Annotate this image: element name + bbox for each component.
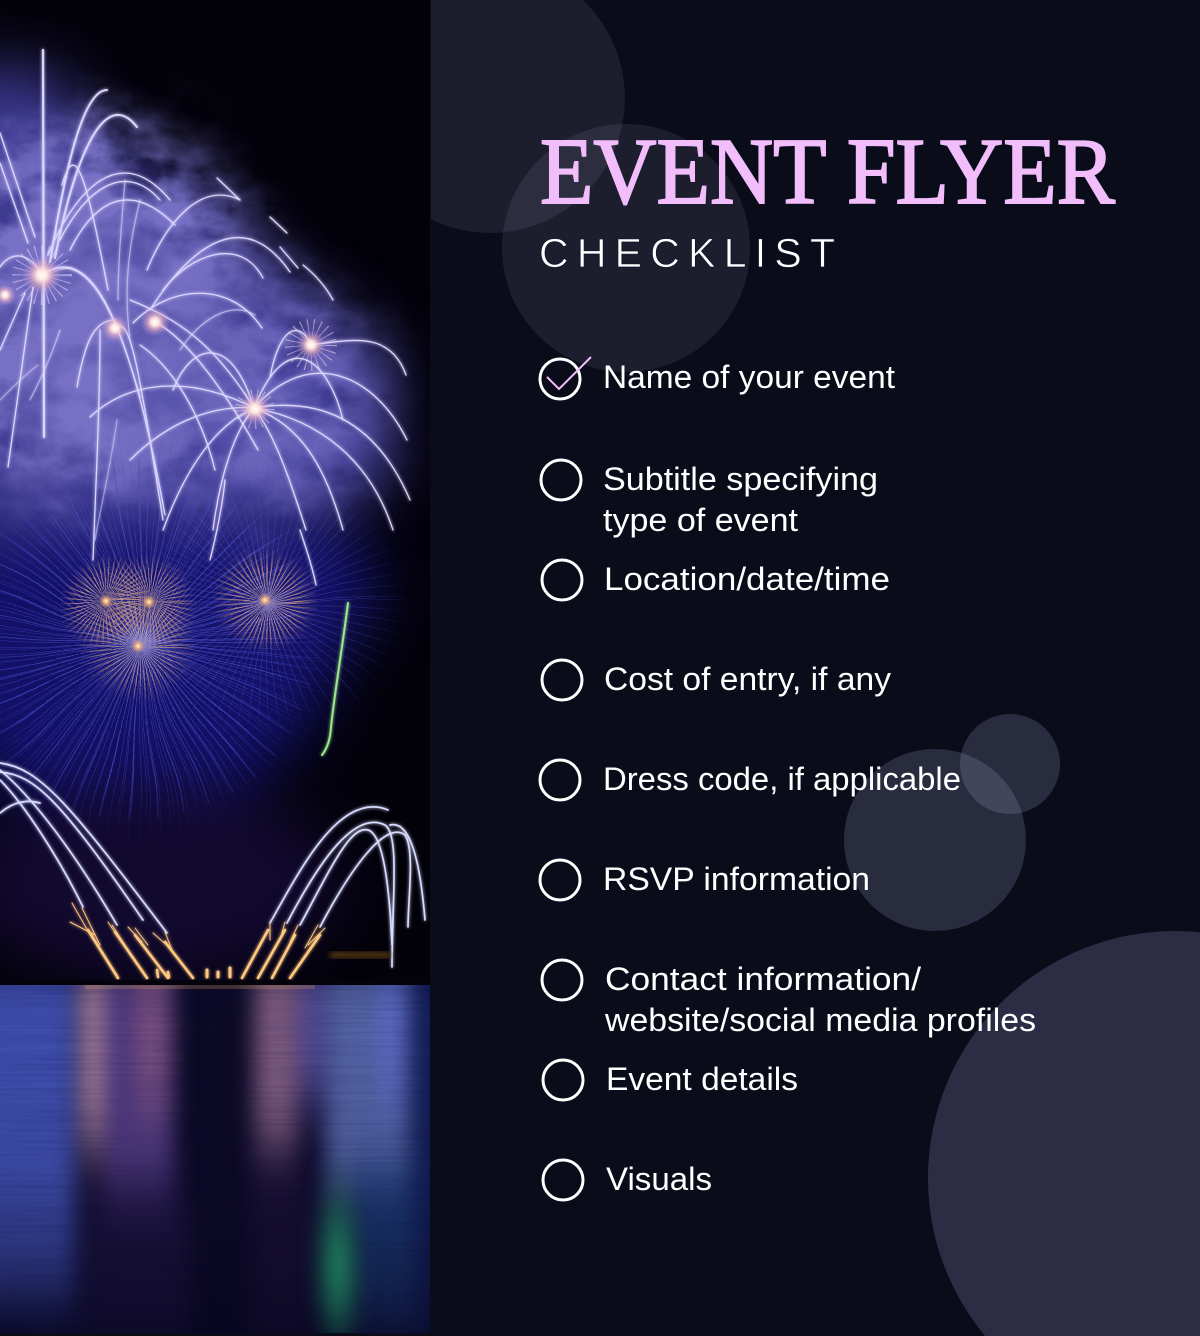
item: location: Location/date/time [604,561,890,597]
orange bursts [83,574,291,676]
burst rays and glowing centres [0,255,326,425]
subtitle: CHECKLIST [539,230,835,276]
item: dress code: Dress code, if applicable [603,761,961,797]
left fountain arcs [0,763,167,933]
item: event details [543,1060,798,1100]
item: event details: Event details [606,1061,798,1097]
item: location [542,560,890,600]
water reflection [0,985,430,1333]
photo: fireworks over water [0,0,445,1336]
smoke cloud base [0,70,395,540]
item: subtitle: Subtitle specifying [603,461,878,497]
item: name of your event, checked [540,357,895,399]
item: cost: Cost of entry, if any [604,661,891,697]
upper white-violet firework trails [0,50,410,585]
checklist [540,357,1036,1200]
green rocket streak [322,603,348,755]
item: contact [542,960,1036,1038]
orange fountain flames [70,903,325,978]
item: rsvp [540,860,870,900]
decorative circles [431,0,1200,1336]
smoke cloud texture [0,120,380,505]
item: contact: Contact information/ [605,961,921,997]
item: visuals: Visuals [606,1161,712,1197]
item: visuals [543,1160,712,1200]
item: subtitle: type of event [603,502,798,538]
item: contact: website/social media profiles [604,1002,1036,1038]
right fountain arcs [270,807,425,967]
item: name of your event, checked: Name of your event [603,359,895,395]
night sky glow [0,465,375,980]
title: EVENT FLYER [540,120,1115,224]
lower blue burst [33,525,340,747]
item: subtitle [541,460,878,538]
distant shore lights [48,951,393,985]
item: rsvp: RSVP information [603,861,870,897]
